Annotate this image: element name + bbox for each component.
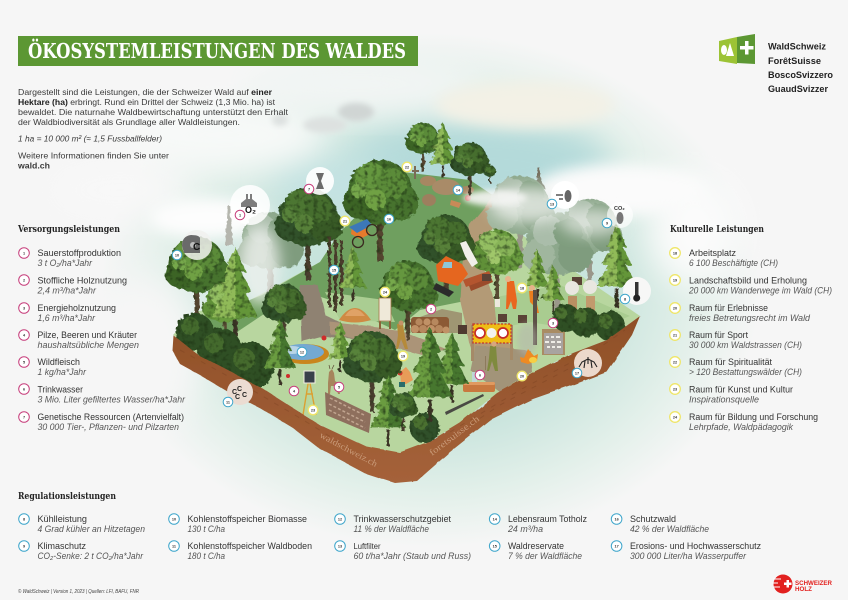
item 23 [670,384,793,404]
item 20 [670,303,811,323]
intro text: 1 ha = 10 000 m² (≈ 1,5 Fussballfelder) [18,134,162,144]
marker numbers: 24 [383,290,388,294]
mossy hill and forest floor [200,172,630,350]
item 5: 1 kg/ha*Jahr [38,367,87,377]
item 6: Trinkwasser [38,384,83,394]
marker numbers: 11 [226,400,230,404]
markers: cultural [308,162,527,415]
icon: soil carbon [227,379,253,405]
information board [379,298,391,329]
icon: carbon biomass [182,230,212,260]
marker numbers: 18 [520,286,524,290]
soil texture [180,330,625,455]
marker numbers: 1 [239,213,241,217]
marker numbers: 6 [479,373,481,377]
item 6 [19,384,186,404]
item 21: 21 [673,333,677,337]
marker numbers: 7 [308,187,310,191]
heading: Kulturelle Leistungen [670,225,765,235]
item 4: Pilze, Beeren und Kräuter [38,330,137,340]
marker numbers: 13 [550,202,554,206]
clouds [50,57,740,435]
item 12: 12 [338,517,342,521]
item 18: Arbeitsplatz [689,248,736,258]
footer credit: © WaldSchweiz | Version 1, 2023 | Quellen: LFI, BAFU, FNR [18,588,139,595]
warning sign [471,324,513,361]
item 23: Inspirationsquelle [689,394,759,404]
logo: WaldSchweiz: GuaudSvizzer [768,84,828,95]
item 8 [19,514,145,534]
item 22 [670,357,802,377]
item 2: 2 [23,278,25,282]
walker on path [396,320,408,349]
island forest illustration [165,123,640,483]
item 9: CO₂-Senke: 2 t CO₂/ha*Jahr [38,551,144,561]
item 14: 24 m³/ha [507,524,543,534]
icon: lungs O2 [230,185,270,225]
icon: CO2 leaf [607,202,633,228]
item 5: Wildfleisch [38,357,80,367]
item 15: 7 % der Waldfläche [508,551,582,561]
item 21 [670,330,802,350]
soil lettering: waldschweiz.ch: waldschweiz.ch [318,430,380,469]
item 13: Luftfilter [354,541,381,551]
ground surface [173,172,640,453]
item 22: 22 [673,360,677,364]
item 18 [670,248,778,268]
item 24 [670,412,818,432]
marker numbers: 9 [606,221,608,225]
item 12: Trinkwasserschutzgebiet [354,514,451,524]
item 14: Lebensraum Totholz [508,514,587,524]
logo: Schweizer Holz: SCHWEIZER [795,581,833,587]
forest paths [300,197,532,392]
item 2: 2,4 m³/ha*Jahr [36,286,97,296]
marker numbers: 3 [552,321,554,325]
item 1: Sauerstoffproduktion [38,248,121,258]
logo: WaldSchweiz [719,34,833,95]
marker numbers: 22 [405,165,409,169]
icon: soil carbon: C [242,392,247,399]
intro text: bewaldet. Die naturnahe Waldbewirtschaftung unterstützt den Erhalt [18,107,289,117]
item 1: 1 [23,251,25,255]
logo: WaldSchweiz: WaldSchweiz [768,42,826,52]
deer [328,365,340,394]
marker numbers: 21 [343,219,347,223]
item 15: 15 [493,544,497,548]
misty background trees [225,168,622,310]
intro text: Dargestellt sind die Leistungen, die der Schweizer Wald auf einer [18,87,273,97]
intro text: Weitere Informationen finden Sie unter [18,150,169,160]
item 19: 19 [673,278,677,282]
icon: carbon biomass: C [193,242,200,253]
panel: Regulationsleistungen [18,492,761,561]
item 11 [169,541,312,561]
service icons on the island [182,167,651,405]
item 4 [19,330,139,350]
soil lettering: foretsuisse.ch: foretsuisse.ch [427,413,482,458]
item 3: Energieholznutzung [38,303,116,313]
icon: thermometer [623,277,651,305]
item 24: Lehrpfade, Waldpädagogik [689,422,794,432]
marker numbers: 19 [401,354,405,358]
item 18: 18 [673,251,677,255]
item 14 [489,514,587,534]
marker numbers: 5 [338,385,340,389]
bench log [463,372,495,392]
item 17: Erosions- und Hochwasserschutz [630,541,761,551]
marker numbers: 8 [624,297,626,301]
title [18,36,418,66]
item 22: Raum für Spiritualität [689,357,772,367]
item 3 [19,303,116,323]
item 2 [19,275,127,296]
foreground trees [264,319,469,446]
item 19 [670,275,832,296]
icon: lungs O2: O₂ [245,205,256,215]
item 20: 20 [673,306,677,310]
heading: Versorgungsleistungen [17,225,121,235]
item 18: 6 100 Beschäftigte (CH) [689,258,778,268]
markers: regulation [172,185,630,407]
intro text: wald.ch [17,160,50,170]
intro text [17,87,289,170]
marker numbers: 15 [332,268,336,272]
item 10: 130 t C/ha [188,524,225,534]
easel [303,371,316,415]
item 6: 6 [23,387,25,391]
intro text: der Waldbiodiversität als Grundlage aller Waldleistungen. [18,117,240,127]
marker numbers: 17 [575,371,579,375]
marker numbers: 4 [293,389,296,393]
item 19: Landschaftsbild und Erholung [689,276,807,286]
item 16: Schutzwald [630,514,676,524]
marker numbers: 10 [175,253,179,257]
item 13: 13 [338,544,342,548]
item 16: 16 [614,517,619,521]
item 17 [611,541,761,561]
panel: Versorgungsleistungen [17,225,186,432]
item 11: 180 t C/ha [188,551,225,561]
item 13 [335,541,471,561]
hiker [485,341,498,371]
bicycle rider [349,219,378,248]
marker numbers: 20 [520,374,524,378]
icon: soil carbon: C [237,386,242,393]
item 15: Waldreservate [508,541,564,551]
markers: provisioning [235,184,558,396]
item 11: 11 [172,544,176,548]
forest workers [495,276,539,345]
item 20: Raum für Erlebnisse [689,303,768,313]
icon: roots [574,349,602,377]
item 7: Genetische Ressourcen (Artenvielfalt) [38,412,184,422]
marker numbers: 16 [387,217,391,221]
firewood crate [542,329,565,355]
item 10 [169,514,307,534]
marker numbers: 14 [456,188,461,192]
icon: air filter [551,181,579,209]
item 3: 1,6 m³/ha*Jahr [38,313,96,323]
title: ÖKOSYSTEMLEISTUNGEN DES WALDES [28,38,406,63]
item 4: 4 [23,333,26,337]
item 8: 4 Grad kühler an Hitzetagen [38,524,145,534]
item 7: 30 000 Tier-, Pflanzen- und Pilzarten [38,422,179,432]
logo: WaldSchweiz: BoscoSvizzero [768,70,833,81]
item 23: 23 [673,387,677,391]
item 23: Raum für Kunst und Kultur [689,384,793,394]
sawdust pile [339,308,371,322]
icon: soil carbon: C [235,394,240,401]
item 16 [611,514,709,534]
item 13: 60 t/ha*Jahr (Staub und Russ) [354,551,471,561]
item 1: 3 t O₂/ha*Jahr [38,258,93,268]
numbered markers on the island [172,162,630,415]
item 8: 8 [23,517,25,521]
marker numbers: 23 [311,408,315,412]
item 24: Raum für Bildung und Forschung [689,412,818,422]
intro text: Hektare (ha) erbringt. Rund ein Drittel der Schweiz (1,3 Mio. ha) ist [18,97,276,107]
marker numbers: 2 [430,307,432,311]
red mushrooms and berries [286,336,326,378]
item 8: Kühlleistung [38,514,87,524]
item 9: 9 [23,544,25,548]
item 2: Stoffliche Holznutzung [38,276,127,286]
heading: Regulationsleistungen [18,492,117,502]
fallen tree trunk [445,394,484,415]
item 17: 17 [614,544,619,548]
icon: DNA [306,167,334,195]
rocks on hill [412,166,474,208]
item 24: 24 [673,415,678,419]
person in front of tree [398,367,413,387]
item 5 [19,357,87,377]
item 21: Raum für Sport [689,330,748,340]
tree stumps [458,274,597,334]
item 7: 7 [23,415,25,419]
logo: Schweizer Holz: HOLZ [795,587,812,593]
icon: soil carbon: C [232,389,237,396]
left scene objects: pond [281,344,329,364]
back trees [165,123,638,345]
item 1 [19,248,121,268]
item 10: Kohlenstoffspeicher Biomasse [188,514,307,524]
marker numbers [175,165,626,412]
item 16: 42 % der Waldfläche [630,524,709,534]
shrubs [176,304,625,443]
logo: WaldSchweiz: ForêtSuisse [768,56,821,67]
mist [240,187,624,305]
item 17: 300 000 Liter/ha Wasserpuffer [630,551,747,561]
item 12 [335,514,451,534]
icon: CO2 leaf: CO₂ [614,206,625,212]
log pile [411,309,462,334]
item 4: haushaltsübliche Mengen [38,340,139,350]
item 19: 20 000 km Wanderwege im Wald (CH) [688,286,832,296]
item 7 [19,412,184,432]
logo: Schweizer Holz [772,574,833,594]
item 15 [489,541,582,561]
marker numbers: 12 [300,350,304,354]
item 6: 3 Mio. Liter gefiltertes Wasser/ha*Jahr [38,394,186,404]
campfire with smoke [517,323,538,364]
item 21: 30 000 km Waldstrassen (CH) [689,340,802,350]
panel: Kulturelle Leistungen [670,225,832,432]
soil edge [172,316,640,483]
item 11: Kohlenstoffspeicher Waldboden [188,541,312,551]
item 9 [19,541,144,561]
item 10: 10 [172,517,176,521]
item 5: 5 [23,360,25,364]
item 22: > 120 Bestattungswälder (CH) [689,367,802,377]
excavator [433,241,493,297]
item 12: 11 % der Waldfläche [354,524,429,534]
item 3: 3 [23,306,25,310]
item 9: Klimaschutz [38,541,86,551]
item 14: 14 [493,517,498,521]
dry stone pile [325,392,371,433]
item 20: freies Betretungsrecht im Wald [689,313,811,323]
